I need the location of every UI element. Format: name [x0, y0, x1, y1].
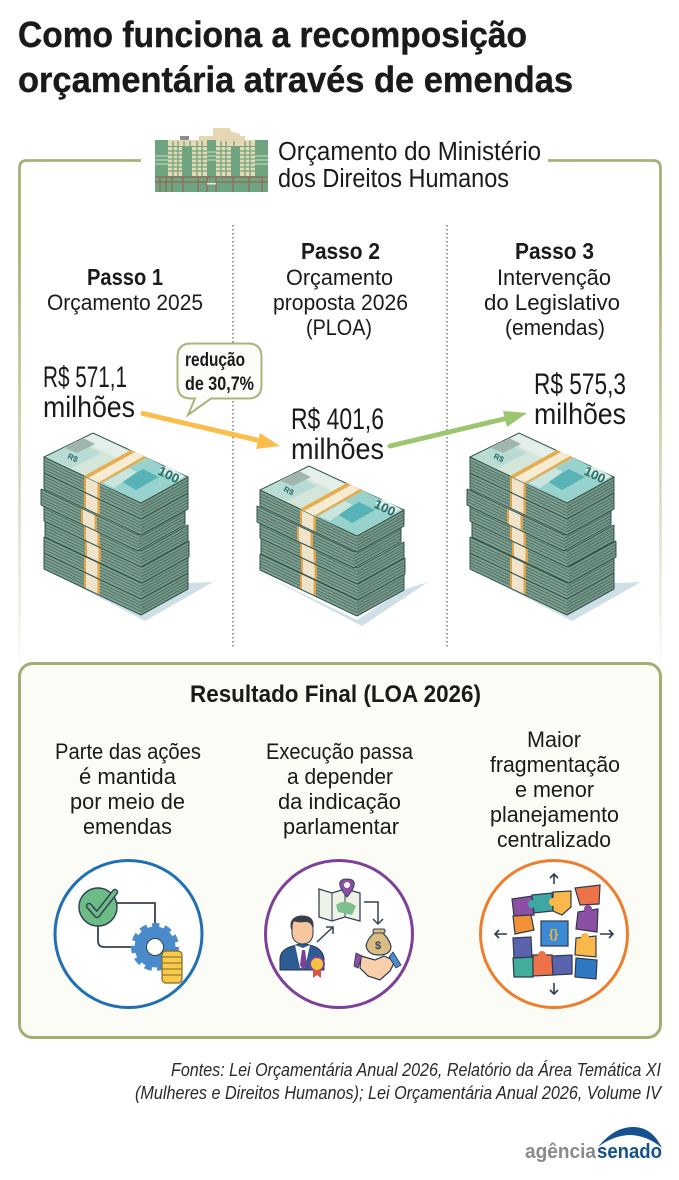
- icon: scattered puzzle: {}: [549, 927, 559, 941]
- amount: 571,1: [43, 361, 135, 424]
- callout: reduction: [178, 344, 262, 415]
- step 3 heading: Passo 3: [515, 238, 594, 264]
- step 2 heading: (PLOA): [306, 315, 372, 340]
- text: column 2: Execução passa: [266, 739, 414, 764]
- step 2 heading: [273, 238, 408, 340]
- money stack 3: 100: [582, 463, 608, 486]
- icon: parliamentarian, map and handshake: [266, 860, 412, 1008]
- step 2 heading: proposta 2026: [273, 290, 408, 315]
- text: column 1: Parte das ações: [55, 739, 201, 764]
- text: column 3: Maior: [527, 727, 581, 752]
- step 1 heading: [47, 264, 203, 315]
- arrow: green increase: [390, 411, 527, 446]
- text: column 3: fragmentação: [490, 752, 620, 777]
- money stack 1: R$: [66, 452, 80, 465]
- callout: reduction: redução: [185, 349, 245, 371]
- step 3 heading: (emendas): [505, 315, 605, 340]
- title: [18, 14, 573, 100]
- step 2 heading: Orçamento: [286, 265, 393, 290]
- money stack 1: [41, 433, 213, 621]
- icon: ministry building: [155, 128, 268, 192]
- panel: final result: [20, 664, 660, 1038]
- step 3 heading: [484, 238, 620, 340]
- icon: parliamentarian, map and handshake: $: [375, 940, 381, 952]
- text: column 1: emendas: [83, 814, 172, 839]
- title: orçamentária através de emendas: [18, 59, 573, 100]
- heading: final result: Resultado Final (LOA 2026): [190, 681, 481, 708]
- text: column 1: [55, 739, 201, 839]
- money stack 2: 100: [372, 496, 398, 519]
- amount: 571,1: milhões: [43, 391, 135, 424]
- icon: scattered puzzle: [480, 860, 628, 1008]
- amount: 575,3: [534, 368, 626, 431]
- title: Como funciona a recomposição: [18, 14, 527, 55]
- text: column 1: é mantida: [79, 764, 177, 789]
- money stack 3: [467, 433, 641, 621]
- step 2 heading: Passo 2: [301, 238, 380, 264]
- money stack 1: 100: [156, 463, 182, 486]
- money stack 2: [257, 466, 428, 626]
- text: column 3: e menor: [515, 777, 594, 802]
- amount: 401,6: R$ 401,6: [291, 403, 384, 436]
- callout: reduction: de 30,7%: [185, 373, 254, 395]
- heading: ministry budget: dos Direitos Humanos: [278, 165, 509, 193]
- step 3 heading: Intervenção: [497, 265, 611, 290]
- text: column 2: parlamentar: [283, 814, 399, 839]
- logo: agência senado: senado: [597, 1141, 662, 1163]
- heading: ministry budget: [278, 138, 541, 193]
- text: column 3: [490, 727, 620, 852]
- amount: 575,3: R$ 575,3: [534, 368, 626, 401]
- logo: agência senado: agência: [525, 1141, 597, 1163]
- step 1 heading: Passo 1: [87, 264, 163, 290]
- icon: check, gear and coins: [55, 860, 202, 1008]
- text: column 1: por meio de: [70, 789, 185, 814]
- sources: [135, 1060, 663, 1103]
- text: column 2: da indicação: [278, 789, 401, 814]
- column dividers: [233, 225, 447, 648]
- panel: budget frame: [20, 160, 660, 660]
- amount: 401,6: [291, 403, 384, 466]
- amount: 571,1: R$ 571,1: [43, 361, 127, 394]
- text: column 3: centralizado: [497, 827, 611, 852]
- amount: 575,3: milhões: [534, 398, 626, 431]
- step 3 heading: do Legislativo: [484, 290, 620, 315]
- step 1 heading: Orçamento 2025: [47, 290, 203, 315]
- heading: ministry budget: Orçamento do Ministério: [278, 138, 541, 166]
- text: column 2: [266, 739, 414, 839]
- text: column 3: planejamento: [490, 802, 619, 827]
- logo: agência senado: [525, 1127, 662, 1163]
- money stack 2: R$: [282, 485, 296, 498]
- money stack 3: R$: [492, 452, 506, 465]
- arrow: yellow decrease: [143, 414, 280, 449]
- amount: 401,6: milhões: [291, 433, 384, 466]
- text: column 2: a depender: [287, 764, 393, 789]
